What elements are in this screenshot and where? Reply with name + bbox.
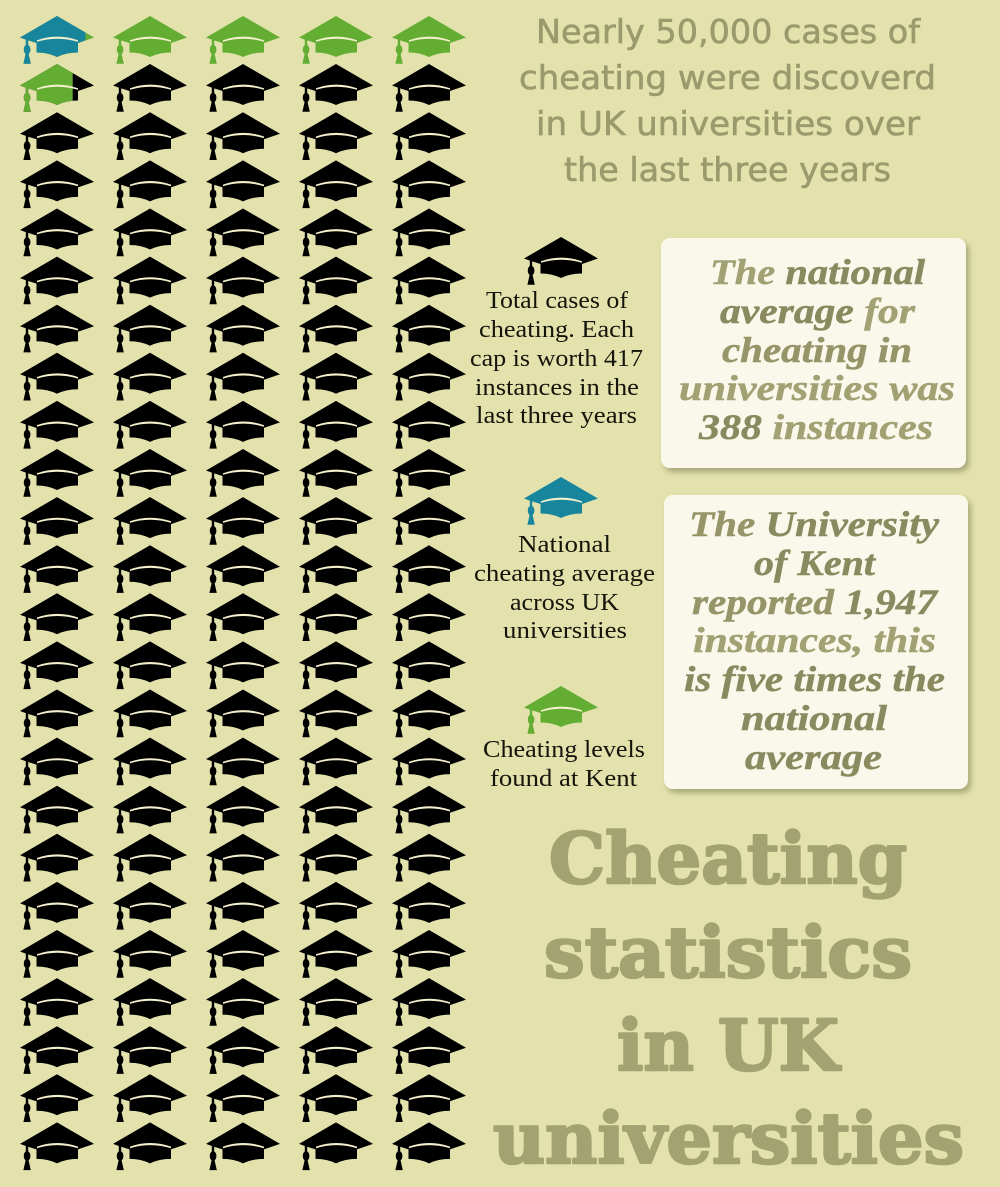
panel: national average callout: 388 instances bbox=[698, 407, 933, 447]
icon: partly green cap (Kent total) bbox=[20, 64, 94, 112]
intro heading: in UK universities over bbox=[536, 104, 920, 143]
title: universities bbox=[493, 1097, 964, 1180]
panel: University of Kent callout: national bbox=[741, 698, 887, 738]
pictogram grid of graduation caps bbox=[20, 16, 466, 1170]
legend text: national average: National bbox=[518, 532, 611, 558]
intro heading: the last three years bbox=[564, 150, 891, 189]
intro heading bbox=[519, 12, 936, 189]
title bbox=[493, 817, 964, 1180]
panel: national average callout: cheating in bbox=[722, 330, 912, 370]
legend text: total cases: cheating. Each bbox=[479, 317, 634, 343]
panel: University of Kent callout: The University bbox=[689, 504, 940, 544]
legend text: Kent: Cheating levels bbox=[483, 737, 645, 763]
panel: national average callout: The national bbox=[710, 252, 925, 292]
legend text: national average: cheating average bbox=[474, 561, 655, 587]
panel: University of Kent callout: is five times the bbox=[684, 659, 945, 699]
panel: University of Kent callout: average bbox=[745, 737, 882, 777]
icon: teal cap with green tip (national average) bbox=[20, 16, 94, 64]
legend: total cases bbox=[470, 237, 643, 429]
legend text: total cases bbox=[470, 288, 643, 429]
panel: University of Kent callout: reported 1,947 bbox=[692, 582, 939, 622]
title: Cheating bbox=[549, 817, 907, 900]
panel: national average callout: average for bbox=[720, 291, 916, 331]
intro heading: Nearly 50,000 cases of bbox=[536, 12, 921, 51]
panel: University of Kent callout bbox=[664, 495, 968, 789]
panel: national average callout bbox=[661, 238, 966, 468]
title: in UK bbox=[617, 1004, 841, 1087]
legend text: national average: universities bbox=[503, 618, 627, 644]
icon: green cap row one bbox=[113, 16, 466, 64]
black caps bbox=[20, 64, 466, 1170]
legend text: national average: across UK bbox=[510, 590, 620, 616]
intro heading: cheating were discoverd bbox=[519, 58, 936, 97]
icon: black cap bbox=[524, 237, 598, 285]
legend text: Kent bbox=[483, 737, 645, 792]
icon: green cap bbox=[524, 686, 598, 734]
legend text: total cases: last three years bbox=[476, 403, 637, 429]
legend text: total cases: Total cases of bbox=[486, 288, 628, 314]
panel: national average callout: universities was bbox=[679, 368, 955, 408]
icon: teal cap bbox=[524, 477, 598, 525]
title: statistics bbox=[544, 911, 912, 994]
legend text: total cases: instances in the bbox=[475, 375, 639, 401]
legend text: national average bbox=[474, 532, 655, 644]
panel: University of Kent callout: instances, this bbox=[693, 620, 936, 660]
legend text: total cases: cap is worth 417 bbox=[470, 346, 643, 372]
legend: Kent bbox=[483, 686, 645, 792]
panel: University of Kent callout: of Kent bbox=[754, 543, 876, 583]
legend text: Kent: found at Kent bbox=[490, 766, 637, 792]
legend: national average bbox=[474, 477, 655, 644]
